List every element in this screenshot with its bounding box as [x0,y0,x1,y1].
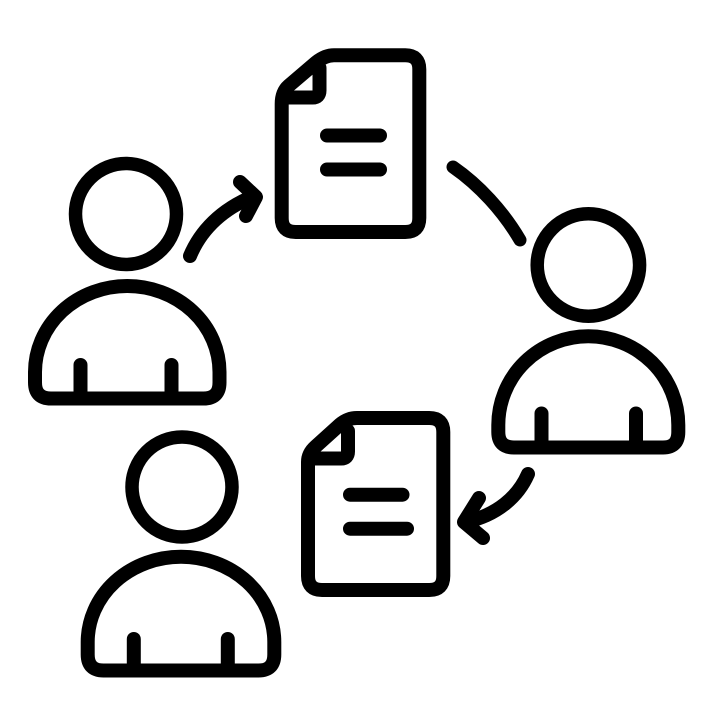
icon: document bottom [308,418,443,590]
icon: document top [282,55,419,232]
icon: person right [498,214,678,448]
icon: person left [35,164,220,398]
arrow: right person to bottom document [464,474,528,538]
arrow: person left to top document [190,182,256,256]
icon: person bottom [88,437,274,670]
arrow: top document to right person [453,167,520,240]
